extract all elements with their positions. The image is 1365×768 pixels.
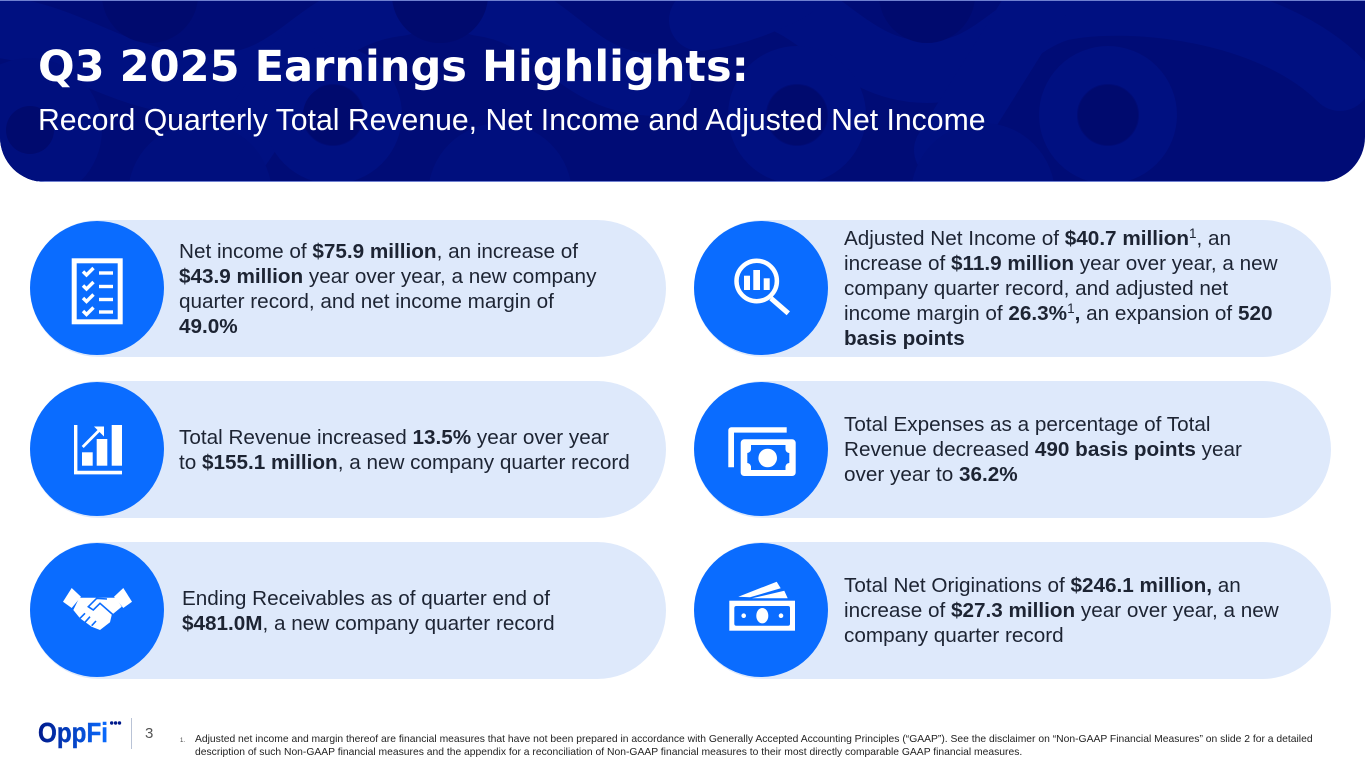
text: net income: [179, 240, 596, 338]
panel: total expenses: [694, 381, 1331, 518]
text: ending receivables: $481.0M, a new company quarter record: [182, 612, 555, 634]
text: adjusted net income: company quarter record, and adjusted net: [844, 277, 1228, 300]
title: Q3 2025 Earnings Highlights:: [38, 42, 749, 92]
panel: total net originations: [694, 542, 1331, 679]
text: total expenses: Revenue decreased 490 basis points year: [844, 438, 1242, 461]
icon: checklist: [30, 221, 164, 355]
panel: total revenue: [30, 381, 666, 518]
text: net income: Net income of $75.9 million, an increase of: [179, 240, 578, 262]
text: total revenue: to $155.1 million, a new company quarter record: [179, 450, 630, 474]
icon: fanned cash: [694, 543, 828, 677]
icon: stacked bills: [694, 382, 828, 516]
footnote: Adjusted net income and margin thereof are financial measures that have not been prepared in accordance with Generally Accepted Accounting Principles (“GAAP”). See the disclaimer on “Non-GAAP Financial Measures” on slide 2 for a detailed: [195, 734, 1313, 745]
text: total expenses: Total Expenses as a percentage of Total: [844, 413, 1210, 436]
text: net income: quarter record, and net income margin of: [179, 290, 554, 312]
text: ending receivables: [182, 586, 555, 634]
footnote: [195, 734, 1313, 758]
logo: OppFi: OppFi: [38, 717, 108, 748]
panel: net income: [30, 220, 666, 357]
text: adjusted net income: [844, 226, 1278, 350]
text: net income: 49.0%: [179, 314, 238, 338]
text: adjusted net income: Adjusted Net Income of $40.7 million1, an: [844, 226, 1231, 250]
text: total net originations: increase of $27.3 million year over year, a new: [844, 599, 1279, 622]
text: total revenue: [179, 426, 630, 474]
footnote: description of such Non-GAAP financial measures and the appendix for a reconciliation of Non-GAAP financial measures to their most directly comparable GAAP financial measures.: [195, 747, 1022, 758]
text: total expenses: over year to 36.2%: [844, 463, 1018, 486]
footnote marker: 1.: [180, 738, 185, 744]
icon: handshake: [30, 543, 164, 677]
icon: magnifier with bars: [694, 221, 828, 355]
text: total net originations: [844, 574, 1279, 647]
text: adjusted net income: basis points: [844, 327, 965, 350]
panel: adjusted net income: [694, 220, 1331, 357]
text: total net originations: company quarter record: [844, 624, 1064, 647]
panel: ending receivables: [30, 542, 666, 679]
text: total net originations: Total Net Originations of $246.1 million, an: [844, 574, 1241, 597]
subtitle: Record Quarterly Total Revenue, Net Income and Adjusted Net Income: [38, 104, 986, 137]
page number: 3: [145, 725, 153, 742]
text: ending receivables: Ending Receivables as of quarter end of: [182, 586, 550, 610]
text: total expenses: [844, 413, 1242, 486]
text: total revenue: Total Revenue increased 13.5% year over year: [179, 426, 609, 448]
header banner: [0, 0, 1365, 182]
text: adjusted net income: increase of $11.9 million year over year, a new: [844, 252, 1278, 275]
icon: growth bar chart: [30, 382, 164, 516]
text: adjusted net income: income margin of 26.3%1, an expansion of 520: [844, 301, 1272, 325]
text: net income: $43.9 million year over year, a new company: [179, 264, 596, 288]
